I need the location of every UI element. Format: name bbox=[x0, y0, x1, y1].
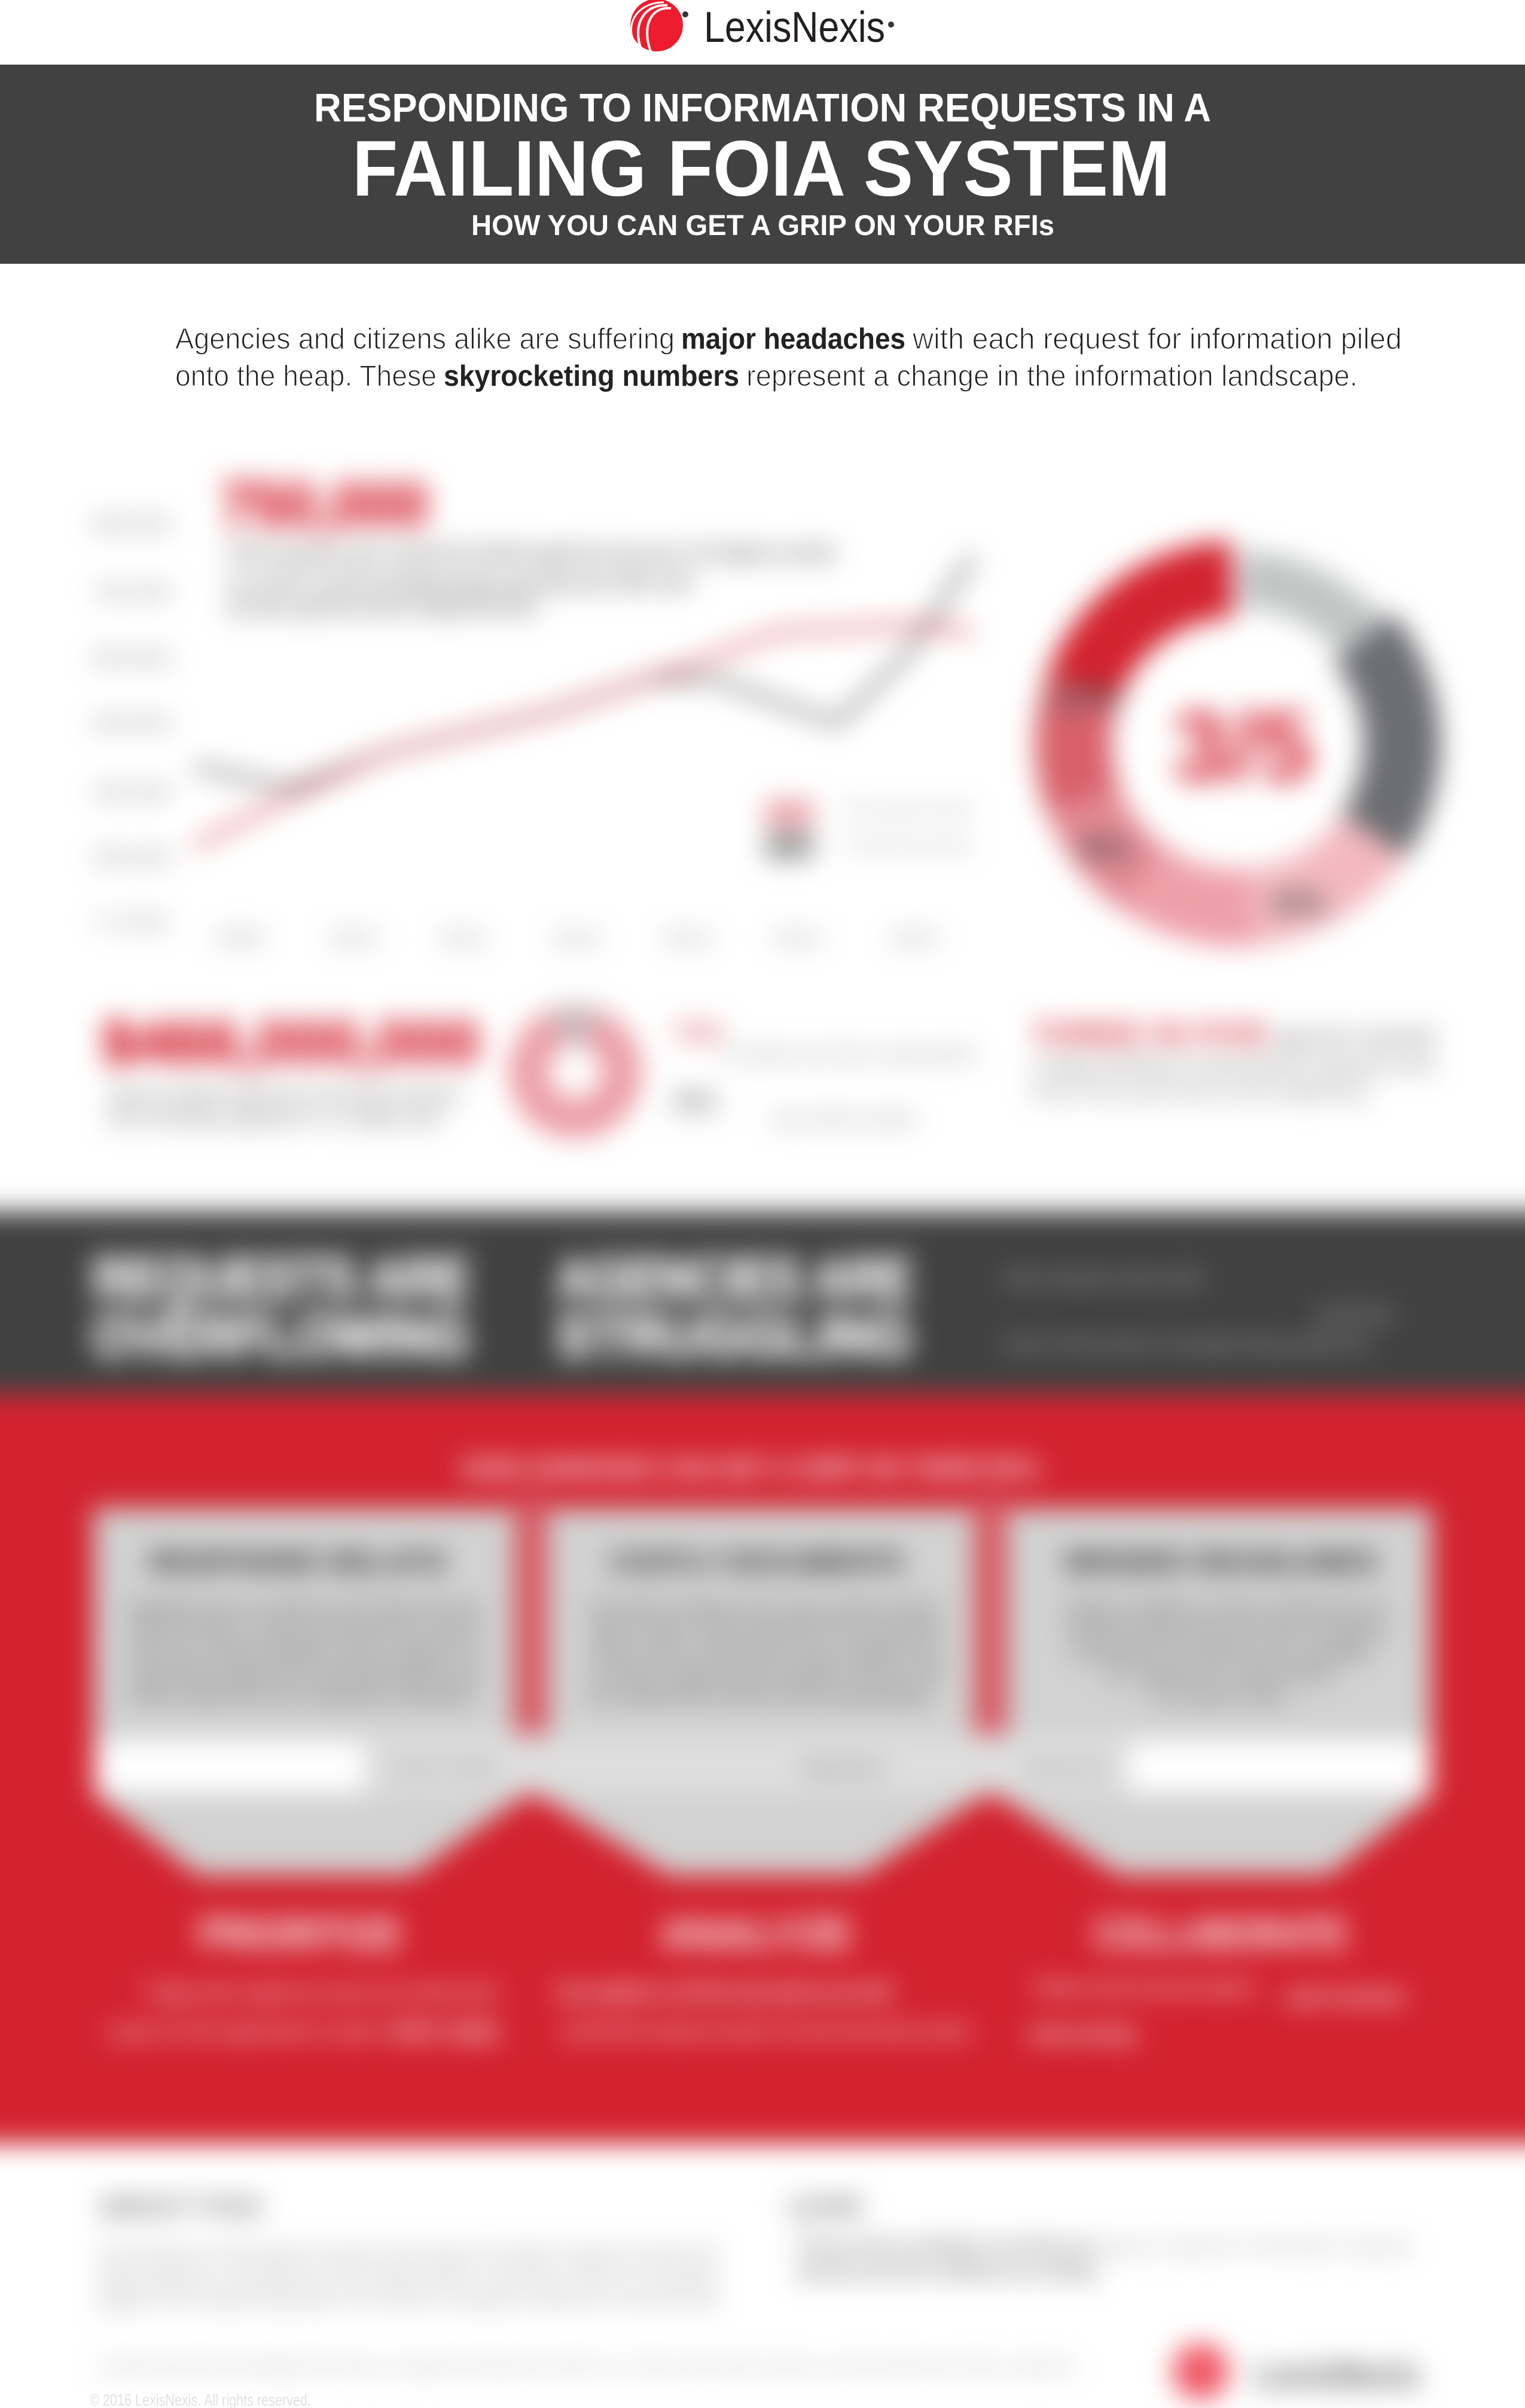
card one body: Backlogs grow as requests arrive faster than the bbox=[129, 1597, 481, 1620]
title line two: FAILING FOIA SYSTEM bbox=[352, 124, 1170, 212]
band heading: left: REQUESTS ARE bbox=[93, 1245, 469, 1312]
chart callout description: across government departments bbox=[227, 594, 538, 618]
card one heading: RESPONSE DELAYS bbox=[149, 1547, 446, 1578]
ring chart annotations: of requests were fully or partly granted bbox=[724, 1044, 975, 1064]
card three body: routinely missed when the volume of requests bbox=[1065, 1619, 1387, 1642]
card one body: and every missed deadline risks an appeal or a bbox=[129, 1641, 481, 1664]
footer logo: LexisNexis bbox=[1254, 2352, 1420, 2396]
card three body: to respond in good time bbox=[1106, 1663, 1334, 1686]
band heading: middle: AGENCIES ARE bbox=[556, 1245, 912, 1312]
donut caption bbox=[1032, 1019, 1435, 1103]
band heading: middle bbox=[556, 1245, 912, 1370]
card one highlight bar bbox=[99, 1742, 364, 1793]
statistic description bbox=[108, 1081, 460, 1129]
column three call to action: securely bbox=[1029, 2021, 1136, 2046]
card two body bbox=[589, 1597, 942, 1708]
gutters between cards bbox=[514, 1495, 1007, 1737]
chart callout number: 750,000 bbox=[221, 470, 428, 540]
card one body: further erodes the trust of requesters everywhere bbox=[129, 1685, 475, 1708]
chart callout description: on record, and the backlog keeps growing year after year bbox=[227, 569, 694, 593]
donut caption: agencies reported bbox=[1274, 1024, 1435, 1048]
card: two bbox=[531, 1508, 990, 1875]
footer: sources column: agency respond to information requests bbox=[1100, 2236, 1411, 2256]
red data line bbox=[194, 625, 973, 846]
column two call to action: Use analytics to sift the documents you hold bbox=[556, 1979, 891, 2004]
donut segment labels: 13% bbox=[1050, 676, 1121, 717]
y axis labels: 300,000 bbox=[93, 848, 170, 867]
card three body: Statutory deadlines of twenty working days are bbox=[1065, 1597, 1387, 1620]
card two body: to manual, duplicated and repetitive reviews of all bbox=[589, 1663, 942, 1686]
introduction text: represent a change in the information landscape. bbox=[746, 360, 1358, 392]
footer: left column: ABOUT FOIA bbox=[97, 2191, 263, 2222]
introduction text bbox=[175, 323, 1402, 392]
donut caption: a larger backlog of unprocessed requests at the bbox=[1032, 1052, 1435, 1077]
x axis labels: 2010 bbox=[330, 928, 377, 948]
card: three bbox=[990, 1508, 1432, 1875]
y axis labels: 800,000 bbox=[93, 514, 170, 534]
footer: left column: The Freedom of Information Act gives every person the right to request records from bbox=[97, 2242, 719, 2262]
footer: sources column: quickly and with confidence by visiting bbox=[797, 2260, 1096, 2282]
introduction text: skyrocketing numbers bbox=[444, 360, 739, 392]
column two call to action: and find the relevant records in far less time than by hand bbox=[562, 2019, 969, 2043]
y axis labels: 600,000 bbox=[93, 648, 170, 668]
column two call to action bbox=[556, 1910, 969, 2043]
chart callout description bbox=[227, 540, 837, 618]
column two call to action: ANALYZE bbox=[660, 1910, 852, 1958]
chart legend bbox=[765, 800, 972, 859]
gray data line bbox=[194, 556, 973, 788]
column one call to action: route it to the right team to start a bbox=[108, 2019, 389, 2043]
donut caption: THREE IN FIVE bbox=[1032, 1019, 1268, 1050]
footer: left column: federal agencies, and agencies must respond within a set period, unless an exemption bbox=[97, 2266, 719, 2286]
card one body: costly lawsuit against the responsible agency and bbox=[129, 1663, 481, 1686]
card two body: citizens ask for, and staff lose many valuable hours bbox=[589, 1641, 942, 1664]
y axis labels: 400,000 bbox=[93, 782, 170, 802]
card three body: overwhelms the staff who are available bbox=[1070, 1641, 1370, 1664]
introduction text: Agencies and citizens alike are suffering bbox=[175, 323, 675, 355]
chart legend: FOIA requests processed bbox=[843, 835, 972, 853]
footer logo bbox=[1172, 2343, 1420, 2400]
column three call to action bbox=[1029, 1910, 1405, 2046]
card three body bbox=[1065, 1597, 1387, 1708]
section heading: HOW AGENCIES CAN GET A GRIP ON THEIR RFIs bbox=[461, 1454, 1040, 1483]
column three call to action: COLLABORATE bbox=[1094, 1910, 1347, 1958]
chart callout description: FOIA requests were received by federal agencies last year, the highest number bbox=[227, 540, 837, 565]
band note: time to find what is actually being asked for bbox=[1006, 1333, 1371, 1355]
introduction text: major headaches bbox=[681, 323, 905, 355]
column one call to action: fast reply bbox=[395, 2017, 500, 2044]
card two heading: COSTLY DOCUMENTS bbox=[610, 1547, 903, 1578]
y axis labels: 500,000 bbox=[93, 714, 170, 733]
introduction text: with each request for information piled bbox=[912, 323, 1402, 355]
donut segment labels bbox=[1050, 676, 1326, 923]
footer: sources column: LEARN bbox=[788, 2191, 862, 2222]
card three body: to each one bbox=[1154, 1685, 1286, 1708]
title line one: RESPONDING TO INFORMATION REQUESTS IN A bbox=[314, 86, 1211, 130]
donut segment labels: 6% bbox=[1274, 883, 1326, 923]
red section bbox=[0, 1394, 1525, 2144]
x axis labels: 2012 bbox=[553, 928, 601, 948]
footer: left column: applies to the material requested. The volume of requests continues to rise each year bbox=[97, 2290, 719, 2310]
introduction text: onto the heap. These bbox=[175, 360, 437, 392]
band note: More requests, fewer staff, bbox=[1006, 1267, 1203, 1290]
card one body: staff can search, review and release the records bbox=[129, 1619, 481, 1642]
x axis labels: 2014 bbox=[774, 928, 822, 948]
card two footnote: Source bbox=[801, 1756, 885, 1778]
card three footnote: Source bbox=[1025, 1756, 1109, 1778]
x axis labels: 2015 bbox=[890, 928, 938, 948]
y axis labels bbox=[93, 514, 170, 867]
x axis labels bbox=[96, 913, 938, 948]
donut chart bbox=[1050, 579, 1402, 923]
x axis labels: 2009 bbox=[215, 928, 263, 948]
card three heading: MISSED DEADLINES bbox=[1065, 1547, 1377, 1578]
line chart bbox=[93, 470, 973, 948]
card two body: Documents scattered across many systems make it bbox=[589, 1597, 942, 1620]
ring chart annotations: 74% bbox=[673, 1015, 724, 1051]
ring chart annotations bbox=[673, 1015, 975, 1129]
small ring chart bbox=[529, 1025, 622, 1118]
column one call to action: Triage each request as soon as it arrives and bbox=[144, 1979, 496, 2004]
donut caption: end of the year than at the beginning bbox=[1032, 1078, 1367, 1103]
column three call to action: and reviews bbox=[1286, 1984, 1405, 2008]
card: one bbox=[94, 1508, 531, 1875]
band note: and less bbox=[1316, 1303, 1393, 1325]
band heading: left: OVERFLOWING bbox=[93, 1303, 469, 1370]
footer: sources column bbox=[788, 2191, 1411, 2282]
y axis labels: 700,000 bbox=[93, 583, 170, 602]
ring chart annotations: 26% bbox=[673, 1084, 718, 1120]
footer: disclaimer: LexisNexis and the Knowledge Burst logo are registered trademarks of RELX Inc. Other products and services may be trademarks of their companies. bbox=[97, 2356, 1078, 2376]
card three highlight bar bbox=[1129, 1742, 1428, 1793]
column three call to action: Share work across teams bbox=[1035, 1975, 1256, 1999]
statistic description: and handling appeals in a single year bbox=[108, 1105, 443, 1129]
chart legend: FOIA requests received bbox=[843, 800, 972, 818]
dark band bbox=[0, 1212, 1525, 1403]
title banner bbox=[0, 65, 1525, 264]
card one footnote: Source data bbox=[389, 1756, 496, 1778]
title line three: HOW YOU CAN GET A GRIP ON YOUR RFIs bbox=[471, 210, 1054, 242]
ring chart annotations: were denied outright bbox=[771, 1109, 916, 1129]
band note bbox=[1006, 1267, 1393, 1355]
statistic: large figure bbox=[102, 1008, 480, 1129]
card one body bbox=[129, 1597, 481, 1708]
logo: LexisNexis: LexisNexis bbox=[704, 4, 885, 51]
x axis labels: FY2008 bbox=[96, 913, 167, 932]
card two body: the material that could be found automatically bbox=[589, 1685, 930, 1708]
column one call to action bbox=[108, 1910, 500, 2044]
x axis labels: 2013 bbox=[664, 928, 712, 948]
statistic: large figure: $466,000,000 bbox=[102, 1008, 480, 1077]
band heading: left bbox=[93, 1245, 469, 1370]
footer: sources column: Find out how LexisNexis can help your bbox=[797, 2235, 1096, 2256]
logo: LexisNexis bbox=[630, 0, 894, 51]
band heading: middle: STRUGGLING bbox=[556, 1303, 912, 1370]
donut segment labels: 9% bbox=[1079, 829, 1131, 869]
x axis labels: 2011 bbox=[440, 928, 487, 948]
column one call to action: PRIORITIZE bbox=[199, 1910, 402, 1958]
footer: left column bbox=[97, 2191, 719, 2310]
card two body: hard to locate, redact and deliver the records that bbox=[589, 1619, 942, 1642]
statistic description: spent by federal agencies processing requests bbox=[108, 1081, 460, 1105]
donut centre value: 3/5 bbox=[1172, 691, 1313, 801]
